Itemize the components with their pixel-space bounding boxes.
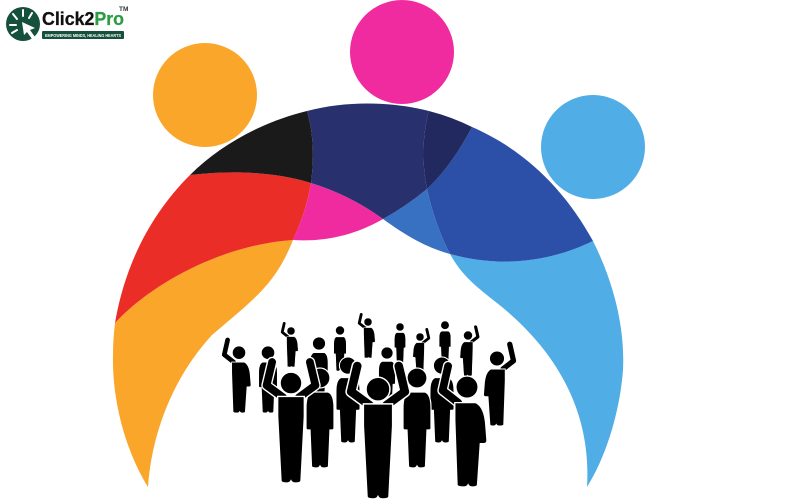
person back row: [439, 321, 451, 363]
crowd of people: [224, 314, 513, 499]
head: pink circle: [350, 0, 454, 104]
person back row: [359, 314, 375, 358]
arch: orange arm: [113, 240, 293, 487]
head: blue circle: [541, 95, 645, 199]
person back row: [460, 327, 478, 376]
person back row: [282, 323, 298, 367]
person front one arm raised: [443, 366, 487, 487]
person middle row: [310, 337, 328, 402]
head: orange circle: [153, 43, 257, 147]
person middle row: [379, 347, 395, 407]
person centre arms raised: [351, 366, 405, 499]
logo tagline: EMPOWERING MINDS, HEALING HEARTS: [45, 33, 121, 38]
overlapping arch: [113, 104, 623, 487]
logo: [6, 6, 128, 41]
arch: navy segment: [307, 104, 429, 219]
person back row: [413, 329, 429, 373]
person middle: [336, 357, 360, 443]
trademark: TM: [119, 6, 128, 13]
arch: pink segment: [293, 183, 383, 240]
arch: dark navy segment: [423, 111, 472, 189]
person left edge: [224, 340, 251, 413]
logo wordmark: Click2Pro: [42, 8, 124, 29]
arch: light blue arm: [450, 241, 623, 487]
person front arms raised: [267, 362, 315, 483]
person right edge: [484, 344, 514, 426]
person middle left: [259, 346, 277, 413]
arch: black segment: [190, 111, 313, 183]
icon: click cursor badge: [6, 7, 40, 41]
person middle right: [430, 357, 454, 443]
person front standing: [306, 368, 334, 468]
arch: red segment: [115, 172, 311, 323]
arch: mid blue segment: [383, 189, 450, 254]
person back row: [334, 326, 346, 371]
person front standing: [403, 368, 431, 468]
person back row: [394, 323, 406, 363]
arch: royal blue segment: [427, 127, 593, 262]
